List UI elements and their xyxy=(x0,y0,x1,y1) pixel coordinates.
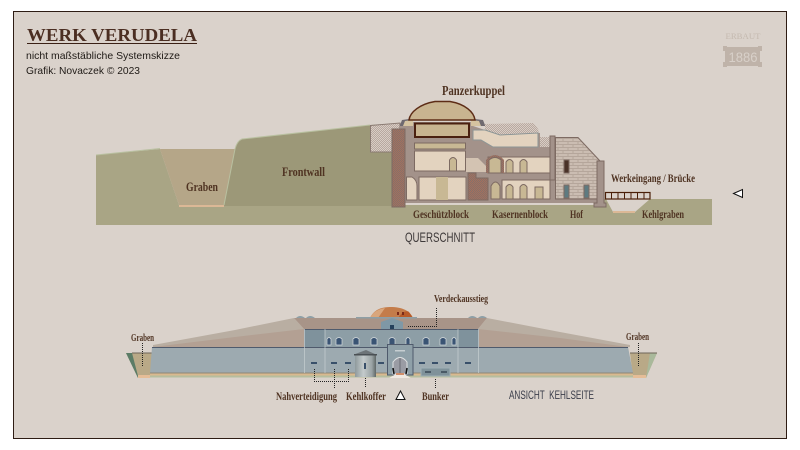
label: Verdeckausstieg: Verdeckausstieg xyxy=(434,293,488,305)
hatched outer wall xyxy=(392,129,405,207)
roof xyxy=(294,318,487,329)
marker: view arrow up xyxy=(396,391,405,400)
terrain: base ground xyxy=(96,149,712,225)
leader: Graben left xyxy=(142,343,144,366)
label: Graben right: Graben xyxy=(626,331,649,343)
label: Graben: Graben xyxy=(186,179,219,194)
heading: Ansicht Kehlseite: ANSICHT KEHLSEITE xyxy=(509,388,594,402)
title: WERK VERUDELA xyxy=(27,25,197,45)
rampart right lower band xyxy=(478,329,628,347)
label: Kehlgraben: Kehlgraben xyxy=(642,207,684,221)
roof ledge xyxy=(356,317,417,318)
rampart right xyxy=(478,318,630,347)
label: Kasernenblock: Kasernenblock xyxy=(492,207,548,221)
rear moat floor xyxy=(613,211,635,213)
bunker xyxy=(421,368,450,376)
gun block rooms xyxy=(406,143,466,200)
kehlkoffer xyxy=(354,350,377,377)
label: Hof: Hof xyxy=(570,207,584,221)
credit: Grafik: Novaczek © 2023 xyxy=(26,65,140,77)
earth cover hatch right xyxy=(485,123,538,135)
outer wall xyxy=(150,347,633,373)
rampart left lower band xyxy=(153,329,304,347)
leader: Bunker xyxy=(434,379,436,388)
badge: erbaut 1886: 1886 xyxy=(728,49,758,65)
hatched magazine xyxy=(468,173,488,200)
dark end blocks xyxy=(304,329,479,347)
roof hatch xyxy=(381,318,403,329)
court wall xyxy=(556,138,600,199)
pilaster lines xyxy=(304,329,478,373)
earth cover hatch left xyxy=(370,123,400,152)
label: Geschützblock: Geschützblock xyxy=(413,207,469,221)
cross-section diagram xyxy=(96,102,712,225)
label: Graben left: Graben xyxy=(131,332,154,344)
small hatched box xyxy=(540,137,550,147)
central building xyxy=(304,329,479,347)
frontwall crest xyxy=(96,125,370,205)
label: Werkeingang / Brücke: Werkeingang / Brücke xyxy=(611,171,695,185)
leader: Nahverteidigung xyxy=(314,369,348,388)
moat: front graben xyxy=(160,149,235,205)
label: Kehlkoffer: Kehlkoffer xyxy=(346,389,386,403)
barrack upper vault xyxy=(473,130,538,147)
leader: Verdeckausstieg xyxy=(408,308,436,326)
elevation diagram xyxy=(126,307,657,378)
turret chamber xyxy=(413,122,471,137)
subtitle: nicht maßstäbliche Systemskizze xyxy=(26,50,180,62)
badge: erbaut 1886: ERBAUT xyxy=(726,31,761,41)
badge: erbaut 1886 xyxy=(723,31,762,67)
inner pillar xyxy=(550,136,555,180)
right moat xyxy=(630,352,657,378)
bridge xyxy=(606,192,650,199)
loopholes xyxy=(311,362,471,364)
label: Frontwall: Frontwall xyxy=(282,164,325,179)
leader: Graben right xyxy=(638,343,640,366)
base strips xyxy=(150,372,633,378)
barrack lower rooms xyxy=(491,180,550,199)
marker: view arrow left xyxy=(734,190,742,198)
armoured dome xyxy=(370,307,413,318)
label: Bunker: Bunker xyxy=(422,389,449,403)
frontwall xyxy=(224,124,395,206)
dome xyxy=(400,102,486,126)
upper windows xyxy=(327,338,456,345)
leader: Kehlkoffer xyxy=(364,378,366,388)
building cornice and wall line xyxy=(152,330,628,348)
court column xyxy=(594,161,606,207)
entrance block xyxy=(388,344,413,378)
label: Panzerkuppel: Panzerkuppel xyxy=(442,84,505,99)
barrack middle rooms xyxy=(466,155,550,173)
small roof vents xyxy=(296,316,487,318)
moat floor xyxy=(179,205,224,207)
heading: Querschnitt: QUERSCHNITT xyxy=(405,229,475,245)
label: Nahverteidigung: Nahverteidigung xyxy=(276,389,337,403)
court windows xyxy=(564,160,589,198)
fort main body xyxy=(399,126,600,203)
left moat xyxy=(126,352,152,378)
rampart left xyxy=(153,318,304,347)
